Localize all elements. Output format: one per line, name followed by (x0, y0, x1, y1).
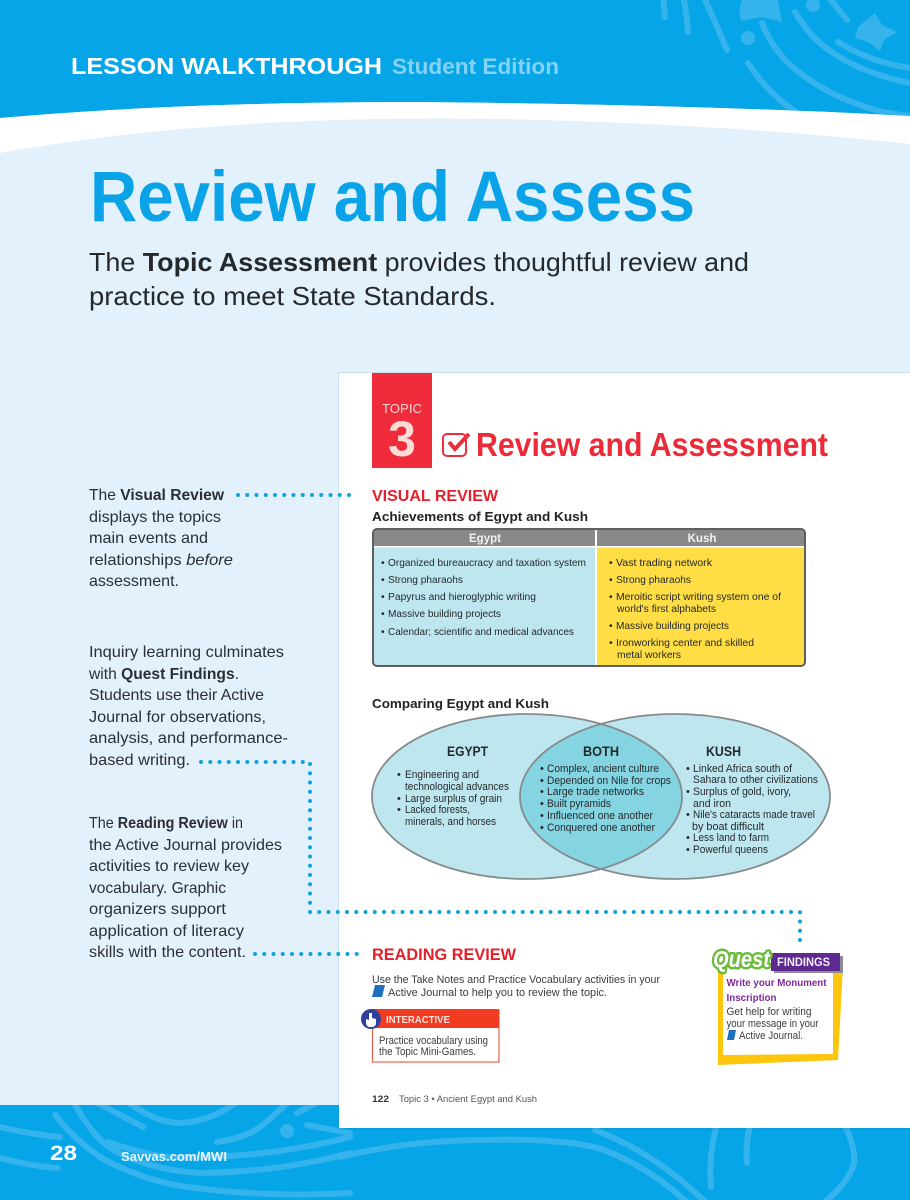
annotation: quest findings: Journal for observations, (89, 709, 266, 726)
header label: LESSON WALKTHROUGH (71, 53, 382, 79)
annotation: visual review: main events and (89, 530, 208, 547)
venn: Egypt: • (397, 804, 401, 816)
topic badge: 3 (388, 411, 416, 467)
venn: Kush: KUSH (706, 744, 741, 759)
venn: Both: Influenced one another (547, 810, 653, 822)
reading review heading: READING REVIEW (372, 945, 517, 964)
venn: Egypt (397, 744, 509, 828)
page folio: 122 (372, 1094, 389, 1105)
interactive callout: Practice vocabulary using (379, 1035, 488, 1047)
interactive callout (361, 1009, 499, 1062)
venn: Both: • (540, 798, 544, 810)
page folio: Topic 3 • Ancient Egypt and Kush (399, 1094, 537, 1105)
icon: checkbox (443, 434, 469, 456)
subtitle (89, 247, 749, 311)
page number: 28 (50, 1142, 77, 1165)
venn: Kush: and iron (693, 798, 731, 810)
table column: Egypt: • (381, 626, 385, 638)
venn: Egypt: EGYPT (447, 744, 489, 759)
venn: Egypt: Lacked forests, (405, 804, 470, 816)
quest findings callout: Active Journal. (739, 1030, 803, 1042)
icon: hand pointer (361, 1009, 381, 1029)
table column: Egypt: • (381, 608, 385, 620)
venn: Egypt: • (397, 793, 401, 805)
venn: Kush: Less land to farm (693, 832, 769, 844)
reading review text (372, 974, 660, 999)
annotation: visual review: displays the topics (89, 509, 221, 526)
table column: Egypt (381, 557, 586, 638)
subtitle: practice to meet State Standards. (89, 281, 496, 311)
venn: Kush: Sahara to other civilizations (693, 774, 818, 786)
venn: Egypt: technological advances (405, 781, 509, 793)
venn: Kush: • (686, 763, 690, 775)
venn: Kush: Linked Africa south of (693, 763, 793, 775)
quest findings callout: FINDINGS (777, 955, 830, 969)
venn: Both: • (540, 810, 544, 822)
table column: Kush: metal workers (617, 649, 681, 661)
quest findings callout: Quest (713, 946, 771, 972)
title: Review and Assess (90, 158, 695, 237)
table column: Kush: • (609, 637, 613, 649)
venn: Both: BOTH (583, 744, 619, 759)
table column: Kush: Vast trading network (616, 557, 713, 569)
annotation: reading review: organizers support (89, 901, 227, 918)
venn: Kush: • (686, 832, 690, 844)
venn: Kush: Powerful queens (693, 844, 768, 856)
footer band (0, 1095, 910, 1200)
table column: Kush: • (609, 591, 613, 603)
annotation: reading review: the Active Journal provides (89, 837, 282, 854)
visual review heading: VISUAL REVIEW (372, 488, 499, 505)
venn diagram (372, 714, 830, 879)
quest findings callout: your message in your (726, 1018, 819, 1030)
table column: Kush: Massive building projects (616, 620, 729, 632)
venn: Egypt: Large surplus of grain (405, 793, 502, 805)
venn: Both: • (540, 775, 544, 787)
venn: Egypt: minerals, and horses (405, 816, 496, 828)
arrow: reading review connector (255, 952, 358, 956)
table (373, 529, 805, 666)
table column: Egypt: Strong pharaohs (388, 574, 463, 586)
table column: Egypt: Organized bureaucracy and taxation system (388, 557, 586, 569)
table: Kush (688, 533, 716, 545)
table title: Achievements of Egypt and Kush (372, 509, 588, 524)
interactive callout: the Topic Mini-Games. (379, 1046, 476, 1058)
header band (0, 0, 910, 153)
quest findings callout: Get help for writing (726, 1006, 812, 1018)
table column: Egypt: Papyrus and hieroglyphic writing (388, 591, 536, 603)
venn: Kush: • (686, 844, 690, 856)
table column: Kush: • (609, 620, 613, 632)
table column: Kush: Strong pharaohs (616, 574, 691, 586)
header label: Student Edition (392, 54, 559, 79)
venn: Kush: by boat difficult (692, 821, 764, 833)
quest findings callout: Write your Monument (726, 977, 827, 989)
table column: Kush (609, 557, 781, 661)
arrow: quest findings connector (201, 762, 800, 945)
interactive callout: INTERACTIVE (386, 1014, 450, 1026)
quest findings callout: Inscription (726, 992, 776, 1004)
annotation: quest findings: based writing. (89, 752, 190, 769)
topic badge (372, 373, 432, 468)
table column: Egypt: • (381, 574, 385, 586)
website: Savvas.com/MWI (121, 1149, 227, 1164)
venn title: Comparing Egypt and Kush (372, 696, 549, 711)
reading review text: Use the Take Notes and Practice Vocabulary activities in your (372, 974, 660, 986)
venn: Both: • (540, 786, 544, 798)
annotation: quest findings: Inquiry learning culminates (89, 644, 284, 661)
table column: Egypt: • (381, 557, 385, 569)
subtitle: The Topic Assessment provides thoughtful review and (89, 247, 749, 277)
reading review text: Active Journal to help you to review the topic. (388, 987, 607, 999)
topic badge: TOPIC (382, 401, 422, 416)
annotation: quest findings: analysis, and performance- (89, 730, 288, 747)
table column: Egypt: • (381, 591, 385, 603)
table column: Kush: Meroitic script writing system one of (616, 591, 781, 603)
annotation: visual review: relationships before (89, 552, 233, 569)
annotation: reading review: activities to review key (89, 858, 249, 875)
venn: Kush: • (686, 786, 690, 798)
venn: Both: • (540, 763, 544, 775)
annotation: reading review: The Reading Review in (89, 815, 243, 832)
table column: Kush: world's first alphabets (616, 603, 716, 615)
venn: Both (540, 744, 671, 834)
venn: Both: Built pyramids (547, 798, 611, 810)
table column: Kush: • (609, 574, 613, 586)
venn: Both: • (540, 822, 544, 834)
annotation: reading review: skills with the content. (89, 944, 246, 961)
venn: Egypt: Engineering and (405, 769, 479, 781)
table: Egypt (469, 533, 501, 545)
table column: Egypt: Massive building projects (388, 608, 501, 620)
annotation: visual review: assessment. (89, 573, 179, 590)
annotation: quest findings (88, 644, 288, 769)
venn: Kush: Surplus of gold, ivory, (693, 786, 791, 798)
page heading: Review and Assessment (476, 426, 828, 463)
annotation: reading review: application of literacy (89, 923, 244, 940)
venn: Kush: • (686, 809, 690, 821)
venn: Both: Conquered one another (547, 822, 655, 834)
header label (71, 53, 559, 79)
table column: Kush: • (609, 557, 613, 569)
venn: Egypt: • (397, 769, 401, 781)
venn: Both: Large trade networks (547, 786, 644, 798)
annotation: visual review: The Visual Review (89, 487, 225, 504)
annotation: visual review (89, 487, 233, 590)
arrow: visual review connector (238, 493, 358, 497)
table column: Kush: Ironworking center and skilled (616, 637, 754, 649)
quest findings callout (713, 946, 843, 1065)
annotation: reading review: vocabulary. Graphic (89, 880, 226, 897)
textbook page (338, 372, 910, 1130)
annotation: quest findings: with Quest Findings. (88, 666, 239, 683)
annotation: reading review (89, 815, 282, 961)
venn: Kush (686, 744, 818, 856)
venn: Both: Complex, ancient culture (547, 763, 659, 775)
table column: Egypt: Calendar; scientific and medical advances (388, 626, 574, 638)
annotation: quest findings: Students use their Active (89, 687, 264, 704)
venn: Kush: Nile's cataracts made travel (693, 809, 815, 821)
venn: Both: Depended on Nile for crops (547, 775, 671, 787)
